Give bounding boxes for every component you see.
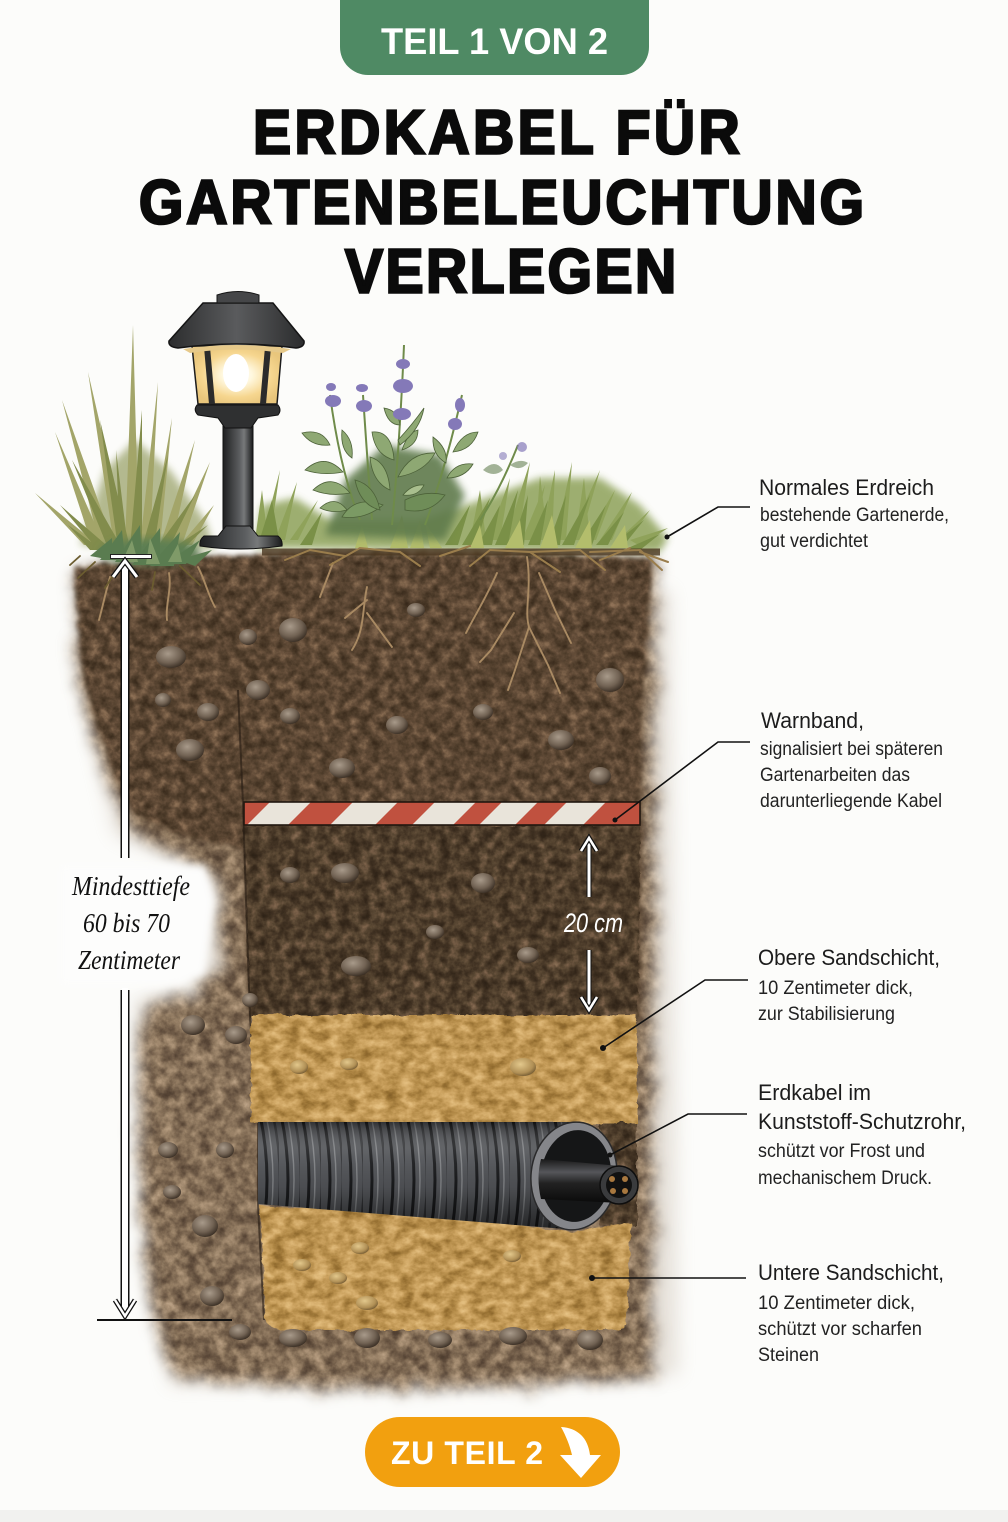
pipe opening — [526, 1118, 622, 1234]
depth label: 60 bis 70 — [83, 908, 170, 938]
left grass tuft — [35, 325, 262, 590]
trench left wall line — [238, 690, 264, 1320]
icon: curved down arrow — [560, 1427, 601, 1478]
callout: Untere Sandschicht: Steinen — [758, 1345, 819, 1366]
corrugated pipe body — [258, 1122, 578, 1230]
grass mass — [255, 478, 668, 552]
bottom edge strip — [0, 1510, 1008, 1522]
callout: Normales Erdreich — [664, 475, 949, 552]
callout: Warnband: signalisiert bei späteren — [760, 739, 943, 760]
lamp roof — [169, 303, 304, 348]
lamp cap — [217, 292, 259, 303]
soil watercolor fringe — [70, 590, 678, 1385]
title — [139, 97, 864, 306]
upper shaft — [120, 568, 130, 858]
callout: Erdkabel im Kunststoff-Schutzrohr: Erdkabel im — [758, 1080, 871, 1105]
callout: Untere Sandschicht — [589, 1260, 944, 1366]
cable end with conductors — [600, 1166, 638, 1204]
root thatch — [262, 548, 660, 556]
callout: Warnband: darunterliegende Kabel — [760, 791, 942, 812]
callout: Erdkabel im Kunststoff-Schutzrohr — [608, 1080, 966, 1189]
title: GARTENBELEUCHTUNG — [139, 167, 864, 237]
upper arrow — [586, 840, 592, 897]
tuft thatch — [72, 554, 262, 558]
white patch behind depth label — [60, 865, 215, 985]
depth label: Mindesttiefe — [71, 871, 190, 901]
callout: Obere Sandschicht — [600, 945, 940, 1051]
top sand layer — [251, 1015, 637, 1123]
callout: Normales Erdreich: bestehende Gartenerde, — [760, 505, 949, 526]
header badge: Teil 1 von 2: TEIL 1 VON 2 — [381, 21, 608, 62]
bottom tick — [97, 1319, 232, 1321]
callout: Warnband: Gartenarbeiten das — [760, 765, 910, 786]
tuft mass — [80, 440, 215, 550]
gravel backfill around trench — [76, 560, 655, 1388]
callout: Untere Sandschicht: 10 Zentimeter dick, — [758, 1293, 915, 1314]
lamp post — [223, 426, 253, 532]
callout: Erdkabel im Kunststoff-Schutzrohr: schützt vor Frost und — [758, 1141, 925, 1162]
grass strip — [255, 462, 668, 572]
depth label: Zentimeter — [78, 945, 180, 975]
darker trench fill — [243, 826, 640, 1018]
lamp glass — [192, 346, 282, 404]
upper arrowhead — [113, 561, 137, 577]
callout: Warnband — [612, 708, 943, 822]
label: 20 cm — [563, 908, 623, 938]
20 cm dimension — [563, 838, 623, 1010]
lower arrow — [586, 950, 592, 1008]
lower arrowhead — [115, 1300, 135, 1316]
callout: Obere Sandschicht: zur Stabilisierung — [758, 1004, 895, 1025]
lamp base — [200, 526, 282, 549]
stones — [155, 603, 624, 1350]
lower sand layer — [260, 1206, 631, 1330]
soil beside pipe end — [600, 1120, 637, 1226]
top tick — [110, 554, 152, 559]
callout: Warnband: Warnband, — [761, 708, 864, 733]
callout: Erdkabel im Kunststoff-Schutzrohr: Kunststoff-Schutzrohr, — [758, 1109, 966, 1134]
tuft base — [90, 525, 212, 566]
callout: Obere Sandschicht: 10 Zentimeter dick, — [758, 978, 913, 999]
leaves — [302, 408, 528, 518]
callout: Obere Sandschicht: Obere Sandschicht, — [758, 945, 940, 970]
stems — [330, 345, 518, 525]
callout: Erdkabel im Kunststoff-Schutzrohr: mechanischem Druck. — [758, 1168, 932, 1189]
button: Zu Teil 2: ZU TEIL 2 — [391, 1435, 543, 1471]
flowering plant — [302, 345, 528, 540]
long blades — [255, 462, 668, 546]
sand pebbles — [290, 1058, 536, 1310]
header badge: Teil 1 von 2 — [340, 0, 649, 75]
callout: Untere Sandschicht: Untere Sandschicht, — [758, 1260, 944, 1285]
callout: Normales Erdreich: gut verdichtet — [760, 531, 869, 552]
lower shaft — [120, 990, 130, 1310]
garden lamp — [169, 292, 304, 549]
depth dimension — [60, 556, 232, 1320]
soil cross-section — [70, 551, 678, 1388]
button: Zu Teil 2 — [365, 1417, 620, 1487]
warning tape — [244, 802, 640, 825]
plant shadow mass — [325, 445, 465, 540]
long blades — [35, 325, 214, 545]
lamp flame glow — [223, 354, 249, 392]
callout: Untere Sandschicht: schützt vor scharfen — [758, 1319, 922, 1340]
cable protection pipe — [258, 1118, 638, 1234]
lamp collar — [195, 405, 280, 428]
lavender flowers — [325, 359, 527, 460]
depth label — [71, 871, 190, 975]
topsoil and trench fill — [74, 551, 653, 1018]
title: ERDKABEL FÜR — [253, 97, 740, 167]
title: VERLEGEN — [345, 236, 676, 306]
roots — [99, 557, 571, 693]
callout: Normales Erdreich: Normales Erdreich — [759, 475, 934, 500]
inner cable — [538, 1159, 620, 1203]
